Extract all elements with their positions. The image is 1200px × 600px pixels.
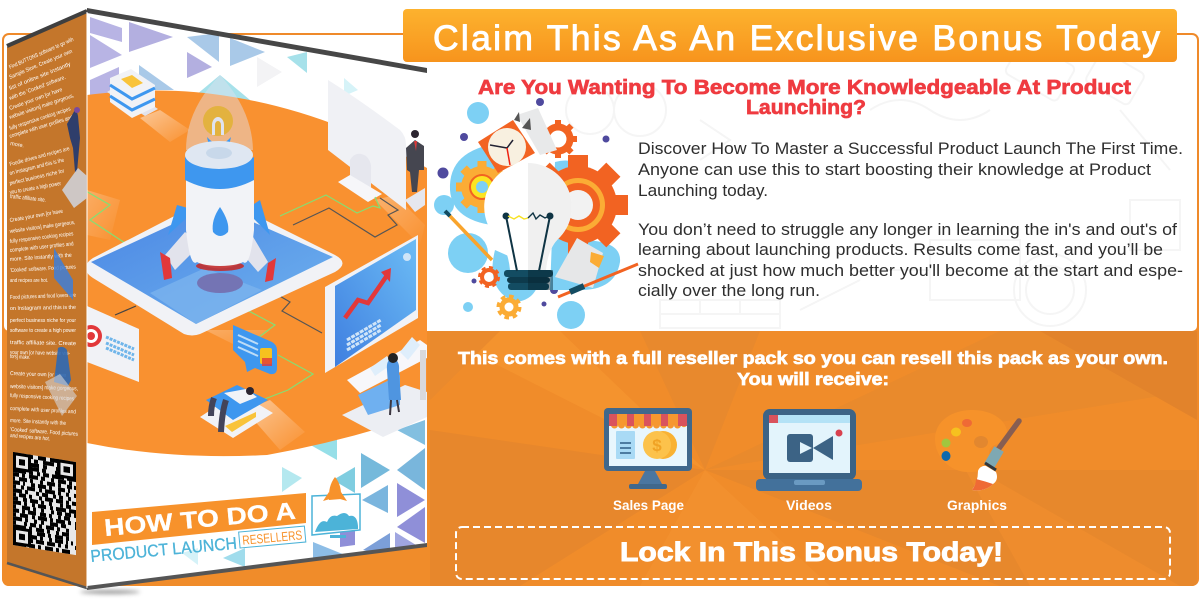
heading: red question bbox=[478, 76, 1131, 119]
icon: sales page monitor bbox=[604, 408, 692, 489]
spine small text: Create your own [or have bbox=[9, 209, 64, 224]
text block: description: Anyone can use this to start boosting their knowledge at Product bbox=[638, 161, 1151, 179]
spine small text: Sample Store. Create your own bbox=[8, 49, 73, 81]
text block: description: Discover How To Master a Successful Product Launch The First Time. bbox=[638, 140, 1183, 158]
text: reseller pack statement: This comes with a full reseller pack so you can resell this pack as your own. bbox=[458, 348, 1168, 368]
icon: graphics palette bbox=[935, 410, 1019, 490]
box corner highlight bbox=[86, 12, 88, 588]
figures overlapping spine bbox=[45, 107, 87, 416]
spine small text: website visitors] make gorgeous, bbox=[8, 93, 75, 121]
spine small text: Create your own [or have bbox=[9, 87, 63, 112]
spine small text: on Instagram and this is the bbox=[9, 158, 65, 177]
logo: how to do a product launch bbox=[90, 477, 360, 566]
triangle pattern bottom bbox=[182, 420, 425, 567]
triangle pattern top bbox=[90, 17, 358, 100]
spine small text: Create your own [or have bbox=[10, 371, 66, 379]
person on sofa bbox=[200, 385, 273, 438]
spine small text: perfect business niche for your bbox=[10, 318, 76, 324]
spine small text: 'Cooked' software. Food pictures bbox=[10, 427, 78, 438]
call to action: lock in bonus bbox=[456, 527, 1170, 579]
heading: red question: Launching? bbox=[746, 96, 866, 119]
logo: how to do a product launch: HOW TO DO A bbox=[103, 498, 297, 542]
spine small text: on Instagram and this is the bbox=[10, 305, 76, 312]
spine small text: website visitors] make gorgeous, bbox=[9, 220, 76, 235]
document sheet bbox=[514, 108, 557, 155]
spine small text: with the 'Cooked' software. bbox=[8, 75, 67, 102]
panel: white upper section bbox=[4, 35, 1197, 331]
text block: description: shocked at just how much better you'll become at the start and espe- bbox=[638, 262, 1183, 280]
panel: orange lower section with shards bbox=[3, 331, 1197, 586]
icon labels: Graphics bbox=[947, 497, 1007, 513]
QR finder squares bbox=[14, 454, 74, 553]
product box bbox=[7, 0, 427, 600]
spine small text: you to create a high power bbox=[9, 181, 62, 196]
box top edge bbox=[87, 8, 427, 73]
coin dollar sign: $ bbox=[652, 436, 662, 455]
spine small text: complete with user profiles and bbox=[10, 406, 76, 415]
icon: videos laptop bbox=[756, 409, 862, 491]
banner: claim this bonus bbox=[403, 9, 1177, 62]
spine small text: Food pictures and food lovers are bbox=[10, 293, 76, 301]
spine small text: fully responsive cooking recipes bbox=[10, 393, 74, 402]
text block: description: You don’t need to struggle any longer in learning the in's and out's of bbox=[638, 221, 1177, 239]
server stack bbox=[107, 69, 158, 118]
tablet bbox=[87, 216, 342, 336]
background doodles bbox=[566, 38, 1180, 328]
spine small text: Foodie drives and recipes are bbox=[9, 146, 70, 168]
paint brush and paper bbox=[555, 238, 638, 297]
target card bbox=[87, 306, 139, 382]
man in suit bbox=[405, 130, 425, 212]
left yellow gear bbox=[456, 161, 508, 213]
box spine bbox=[7, 10, 87, 588]
spine small text: and recipes are hot. bbox=[10, 433, 51, 443]
spine small text: fully responsive cooking recipes bbox=[9, 106, 72, 132]
box front cover bbox=[87, 13, 427, 586]
spine small text: traffic affiliate site. Create bbox=[10, 340, 76, 347]
spine small text: your own [or have website visi- bbox=[10, 350, 70, 357]
pencil bbox=[445, 211, 492, 260]
monitor with stand bbox=[328, 80, 406, 210]
resellers badge: RESELLERS bbox=[242, 527, 303, 548]
gear cog bottom bbox=[480, 268, 520, 318]
big red gear bbox=[528, 155, 628, 255]
text block: description bbox=[638, 140, 1183, 300]
spine small text bbox=[8, 37, 78, 443]
icon labels bbox=[613, 497, 1007, 513]
small orange gear bbox=[542, 120, 577, 158]
call to action text: Lock In This Bonus Today! bbox=[620, 537, 1003, 567]
box bottom edge bbox=[87, 543, 427, 590]
spine small text: more. bbox=[10, 141, 25, 149]
spine small text: software to create a high power bbox=[10, 328, 76, 334]
spine small text: website visitors] make gorgeous, bbox=[9, 384, 78, 392]
banner title: Claim This As An Exclusive Bonus Today bbox=[433, 18, 1160, 58]
circuit lines bbox=[66, 190, 398, 400]
icon: light bulb with gears bbox=[434, 98, 638, 329]
spine small text: more. Site instantly with the bbox=[10, 418, 66, 427]
spine small text: complete with user profiles and bbox=[10, 241, 74, 254]
spine small text: tors] make. bbox=[10, 354, 30, 361]
heading: red question: Are You Wanting To Become More Knowledgeable At Product bbox=[478, 76, 1131, 99]
chart panel bbox=[325, 235, 418, 373]
text: reseller pack statement bbox=[458, 348, 1168, 389]
spine small text: list of online site instantly bbox=[9, 61, 72, 92]
text block: description: cially over the long run. bbox=[638, 282, 820, 300]
spine small text: fully responsive cooking recipes bbox=[10, 231, 74, 245]
icon labels: Sales Page bbox=[613, 497, 684, 513]
spine small text: more. Site instantly with the bbox=[10, 253, 72, 263]
clock bbox=[478, 120, 535, 173]
spine small text: traffic affiliate site. bbox=[10, 194, 47, 204]
bulb bbox=[484, 163, 572, 290]
spine QR code bbox=[13, 452, 76, 555]
logo: how to do a product launch: PRODUCT LAUNCH bbox=[90, 534, 238, 566]
spine small text: and recipes are hot. bbox=[10, 278, 48, 284]
logo rocket icon bbox=[312, 477, 360, 538]
spine small text: complete with user profiles and bbox=[9, 115, 74, 140]
light beams bbox=[140, 110, 190, 142]
text block: description: learning about launching products. Results come fast, and you’ll be bbox=[638, 241, 1163, 259]
rocket bbox=[160, 75, 276, 293]
text block: description: Launching today. bbox=[638, 182, 768, 200]
spine small text: perfect business niche for bbox=[9, 168, 65, 187]
icon labels: Videos bbox=[786, 497, 832, 513]
orange scene background bbox=[87, 90, 427, 456]
spine small text: 'Cooked' software. Food pictures bbox=[10, 265, 76, 274]
text: reseller pack statement: You will receive: bbox=[737, 369, 889, 389]
spine small text: Find BUTTONS software to go with bbox=[8, 37, 75, 71]
desk with people bbox=[342, 337, 427, 437]
chat bubble chart bbox=[233, 325, 277, 374]
